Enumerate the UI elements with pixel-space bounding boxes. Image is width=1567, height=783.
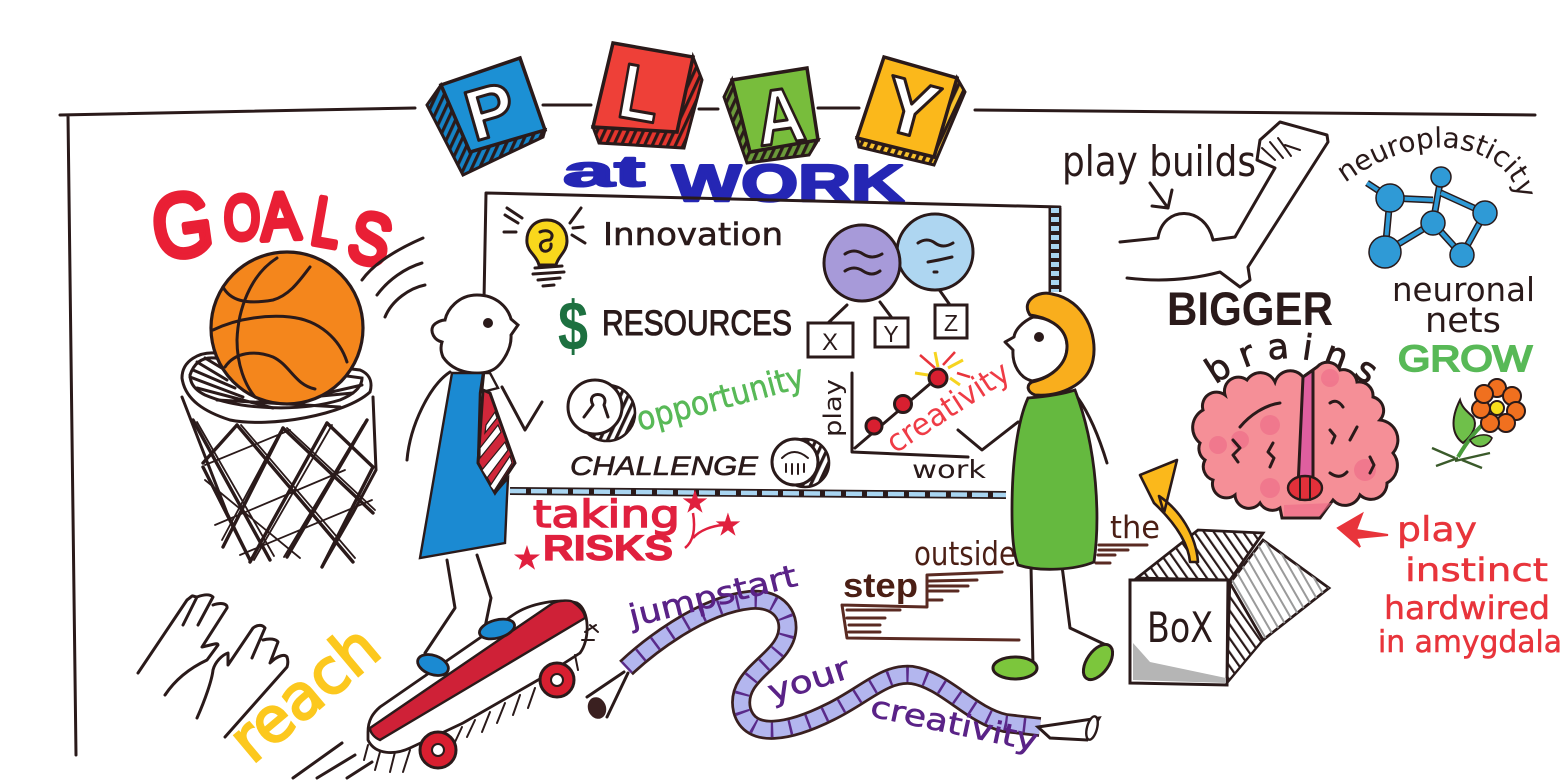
block A: A bbox=[750, 69, 810, 163]
text: jumpstart your creativity: your bbox=[763, 650, 855, 711]
block Y: Y bbox=[873, 58, 948, 157]
body bbox=[420, 373, 508, 558]
arrow to amygdala bbox=[1338, 514, 1388, 547]
speed lines bbox=[362, 238, 425, 317]
icon: dollar: $ bbox=[558, 287, 588, 365]
block L: L bbox=[612, 46, 667, 140]
text: taking risks: ★ bbox=[715, 508, 741, 543]
block Y bbox=[857, 57, 965, 165]
text: taking risks: ★ bbox=[513, 539, 541, 577]
text: reach: reach bbox=[215, 610, 393, 776]
icon: coin challenge bbox=[772, 439, 829, 487]
text: neuroplasticity: neuroplasticity bbox=[1338, 126, 1533, 194]
venn circles xyz bbox=[808, 214, 973, 357]
steps and step outside the: the bbox=[1110, 510, 1160, 546]
net bbox=[182, 397, 376, 567]
text: neuronal nets: nets bbox=[1425, 301, 1501, 341]
text: Innovation: Innovation bbox=[603, 217, 783, 253]
text: play instinct hardwired in amygdala: instinct bbox=[1405, 551, 1548, 589]
text: jumpstart your creativity bbox=[624, 558, 1041, 759]
block L bbox=[593, 43, 702, 148]
text: taking risks: ★ bbox=[682, 485, 708, 520]
chart: play vs work: play bbox=[819, 379, 847, 437]
block P bbox=[427, 58, 545, 175]
feet bbox=[993, 657, 1037, 679]
text: Resources: RESOURCES bbox=[602, 304, 792, 343]
goals: O bbox=[224, 184, 260, 253]
subtitle: at WORK bbox=[563, 147, 905, 213]
box with yellow arrow: BoX bbox=[1147, 603, 1213, 652]
body bbox=[1012, 390, 1097, 569]
icon: skateboard bbox=[293, 601, 598, 778]
arms and legs bbox=[407, 372, 542, 653]
icon: jump rope bbox=[585, 600, 1100, 741]
subtitle: at WORK: WORK bbox=[672, 155, 905, 213]
whiteboard bbox=[484, 193, 1060, 495]
text: neuronal nets bbox=[1392, 270, 1535, 341]
dollar sign and Resources bbox=[558, 287, 792, 365]
goals: S bbox=[341, 196, 399, 283]
subtitle: at WORK: at bbox=[563, 147, 646, 196]
venn circles xyz: X bbox=[822, 329, 838, 356]
icon: flower bbox=[1432, 379, 1525, 468]
play builds text and arm: play builds bbox=[1062, 137, 1256, 186]
opportunity bbox=[568, 357, 808, 441]
text: jumpstart your creativity: jumpstart bbox=[624, 558, 801, 635]
figure: woman in green bbox=[958, 293, 1118, 685]
text: opportunity: opportunity bbox=[632, 357, 808, 439]
feet bbox=[415, 651, 451, 679]
tie bbox=[478, 390, 515, 493]
steps and step outside the bbox=[842, 510, 1160, 640]
text: play instinct hardwired in amygdala: play bbox=[1397, 510, 1477, 550]
arms bbox=[958, 398, 1107, 463]
chart: play vs work bbox=[819, 352, 1017, 484]
title: PLAY blocks bbox=[427, 43, 965, 175]
head bbox=[432, 295, 518, 373]
text: taking risks: taking bbox=[533, 493, 680, 536]
venn circles xyz: Y bbox=[883, 321, 899, 347]
text: jumpstart your creativity: creativity bbox=[867, 690, 1041, 759]
icon: neuron network bbox=[1367, 167, 1497, 268]
text: play instinct hardwired in amygdala bbox=[1378, 510, 1562, 660]
box with yellow arrow bbox=[1130, 460, 1329, 685]
text: brains: brains bbox=[1202, 332, 1376, 384]
text: taking risks bbox=[513, 485, 741, 577]
challenge bbox=[570, 439, 829, 487]
link lines between blocks bbox=[543, 105, 859, 109]
text: neuronal nets: neuronal bbox=[1392, 270, 1535, 309]
play builds text and arm bbox=[1062, 122, 1328, 287]
icon: brain bbox=[1193, 362, 1398, 518]
venn circles xyz: Z bbox=[944, 310, 958, 336]
icon: basketball and hoop bbox=[182, 238, 425, 567]
innovation bbox=[504, 208, 783, 286]
text: taking risks: RISKS bbox=[543, 529, 673, 568]
text: play instinct hardwired in amygdala: in amygdala bbox=[1378, 625, 1562, 660]
steps and step outside the: step bbox=[843, 567, 918, 605]
text: BIGGER: BIGGER bbox=[1167, 282, 1333, 335]
ball bbox=[211, 252, 363, 404]
figure: man with blue tie bbox=[407, 295, 542, 679]
icon: light bulb bbox=[504, 208, 585, 286]
icon: coin bbox=[568, 380, 635, 441]
icon: reaching hands bbox=[138, 595, 288, 737]
goals: G bbox=[146, 172, 219, 280]
goals: A bbox=[259, 178, 302, 254]
face bbox=[1005, 317, 1067, 381]
text: creativity: creativity bbox=[880, 354, 1017, 461]
text: GROW: GROW bbox=[1398, 338, 1532, 379]
goals: L bbox=[306, 183, 347, 263]
steps and step outside the: outside bbox=[914, 534, 1016, 573]
rim bbox=[182, 353, 371, 422]
goals bbox=[146, 172, 399, 283]
hair bbox=[1027, 293, 1094, 395]
block P: P bbox=[456, 67, 525, 157]
text: play instinct hardwired in amygdala: hardwired bbox=[1384, 589, 1550, 627]
legs bbox=[1031, 566, 1106, 667]
chart: play vs work: work bbox=[912, 455, 987, 484]
challenge: CHALLENGE bbox=[570, 451, 759, 481]
